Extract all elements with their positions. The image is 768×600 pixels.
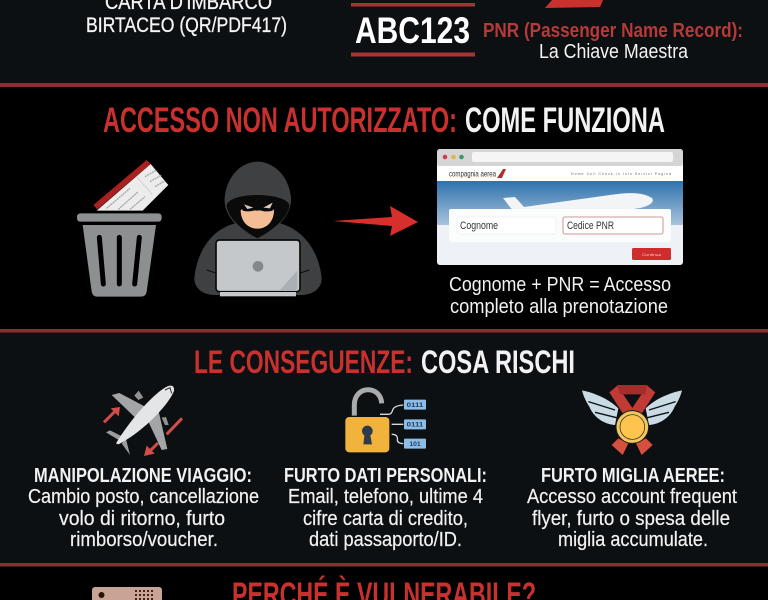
PNR field: [563, 217, 663, 234]
text: travel manipulation: volo di ritorno, furto: [59, 508, 225, 530]
text: travel manipulation: [28, 465, 259, 551]
PNR code sample: ABC123: [355, 10, 470, 51]
caption: surname plus PNR: completo alla prenotazione: [450, 296, 668, 318]
text: personal data theft: [284, 465, 487, 551]
panel: boarding pass and PNR: [86, 0, 743, 63]
icon: boarding pass in trash can: [77, 160, 168, 297]
text: travel manipulation: rimborso/voucher.: [70, 529, 218, 551]
icon: open padlock with data: 101: [409, 441, 421, 448]
text: personal data theft: Email, telefono, ultime 4: [288, 486, 483, 508]
icon: open padlock with data: 0111: [407, 422, 424, 429]
PNR code sample: [351, 3, 475, 56]
icon: red key fragment: [545, 0, 603, 8]
PNR description: La Chiave Maestra: [539, 41, 689, 63]
text: air miles theft: FURTO MIGLIA AEREE:: [541, 465, 725, 487]
panel: how unauthorized access works: [77, 101, 683, 318]
website brand: compagnia aerea: [449, 170, 496, 178]
panel: why vulnerable: [92, 576, 536, 600]
heading: consequences: LE CONSEGUENZE:: [194, 344, 413, 380]
surname field: Cognome: [460, 220, 498, 232]
website login mockup: [437, 149, 683, 265]
PNR description: [483, 20, 743, 63]
text: air miles theft: Accesso account frequent: [527, 486, 737, 508]
text: air miles theft: [527, 465, 737, 551]
boarding pass caption: [86, 0, 287, 37]
website menu: Home Voli Check-in Info Servizi Pagina: [571, 172, 671, 176]
icon: hooded hacker with laptop: [194, 162, 322, 296]
icon: open padlock with data: 0111: [407, 402, 424, 409]
text: personal data theft: cifre carta di credito,: [303, 508, 468, 530]
text: travel manipulation: Cambio posto, cancellazione: [28, 486, 259, 508]
arrow: red arrow to website: [333, 206, 418, 236]
heading: how it works: ACCESSO NON AUTORIZZATO:: [103, 101, 457, 140]
text: air miles theft: flyer, furto o spesa delle: [532, 508, 730, 530]
icon: printer device: [92, 587, 162, 600]
panel: consequences: [28, 344, 737, 551]
boarding pass caption: BIRTACEO (QR/PDF417): [86, 14, 287, 37]
icon: winged medal: [582, 385, 682, 455]
caption: surname plus PNR: Cognome + PNR = Accesso: [449, 274, 671, 296]
heading: how it works: COME FUNZIONA: [465, 101, 665, 140]
heading: consequences: COSA RISCHI: [421, 344, 575, 380]
caption: surname plus PNR: [449, 274, 671, 318]
red submit button: [632, 248, 671, 260]
icon: open padlock with data: [345, 390, 426, 452]
red submit button: Continua: [642, 253, 661, 257]
text: air miles theft: miglia accumulate.: [558, 529, 708, 551]
text: personal data theft: FURTO DATI PERSONALI:: [284, 465, 487, 487]
surname field: [457, 217, 556, 234]
icon: plane with red arrows: [104, 386, 182, 456]
text: personal data theft: dati passaporto/ID.: [309, 529, 462, 551]
text: travel manipulation: MANIPOLAZIONE VIAGGIO:: [34, 465, 252, 487]
PNR field: Cedice PNR: [567, 220, 614, 232]
